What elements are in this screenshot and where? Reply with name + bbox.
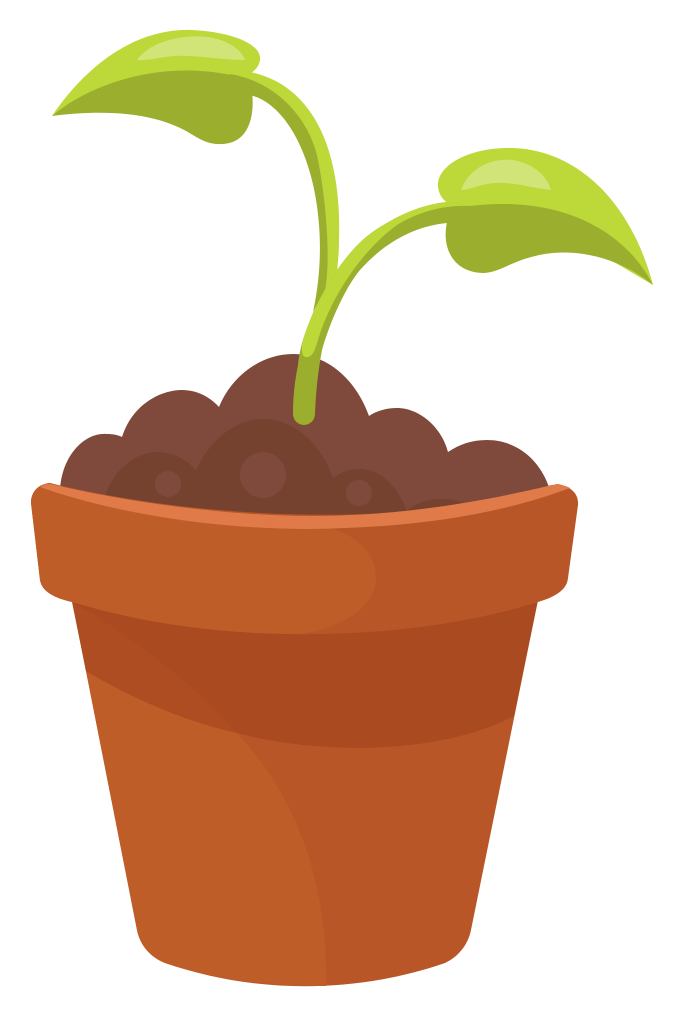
soil: [60, 354, 550, 530]
pot body: shaded band: [72, 600, 538, 748]
rim: light patch: [31, 483, 376, 634]
pot body: [72, 600, 538, 986]
rim: top lip: [40, 484, 570, 529]
soil: pebbles: [155, 452, 372, 506]
pot body: band highlight: [72, 602, 237, 733]
soil: dark clumps: [104, 419, 466, 516]
pot rim: [31, 483, 578, 634]
pot body: light side: [86, 671, 326, 986]
left leaf: [52, 30, 260, 144]
right stem: [293, 202, 470, 425]
left stem: [230, 72, 339, 312]
right leaf: [438, 148, 653, 285]
